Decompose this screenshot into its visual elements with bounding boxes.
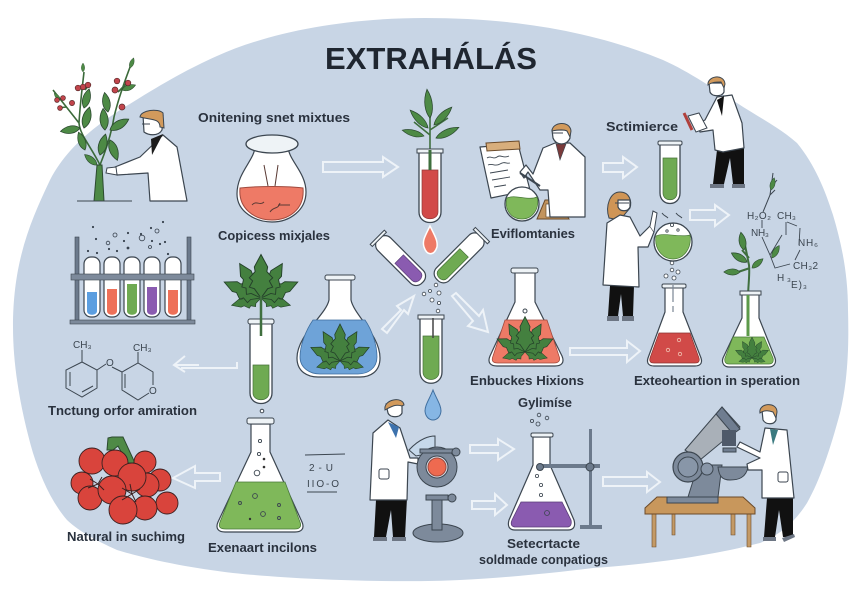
label: gylimise: Gylimíse — [518, 395, 572, 410]
apparatus — [409, 436, 463, 542]
test tube rack — [70, 221, 195, 324]
arrow — [690, 205, 729, 226]
title: EXTRAHÁLÁS — [325, 41, 537, 76]
purple flask and stand — [508, 413, 602, 530]
molecule — [66, 340, 157, 400]
molecule: CH₃ — [133, 343, 152, 354]
scientist bottom center — [370, 400, 418, 541]
blue drop — [425, 390, 441, 420]
arrow — [570, 341, 640, 362]
label: evifl: Eviflomtanies — [491, 226, 575, 241]
formula note: 2-U — [309, 463, 333, 474]
molecule: O — [149, 386, 157, 397]
arrow: down right — [452, 293, 488, 332]
green erlenmeyer — [217, 418, 303, 532]
formula note — [305, 454, 345, 492]
label: exenaart: Exenaart incilons — [208, 540, 317, 555]
label: science: Sctimierce — [606, 119, 678, 134]
tilted green tube — [430, 227, 490, 287]
label: natural: Natural in suchimg — [67, 529, 185, 544]
label: tincture: Tnctung orfor amiration — [48, 403, 197, 418]
green flask with plant — [722, 232, 776, 367]
label: selective: Setecrtacte — [507, 536, 580, 551]
bubbles — [422, 283, 441, 313]
woman scientist — [603, 192, 657, 321]
clipboard — [480, 141, 530, 198]
scientist with plant — [106, 110, 187, 201]
chemical formula with sprig: E)₃ — [791, 280, 807, 291]
formula note: IIO-O — [307, 479, 339, 490]
chemical formula with sprig: CH₃ — [777, 211, 796, 222]
tilted purple tube — [370, 230, 430, 290]
arrow left — [174, 356, 237, 372]
arrow — [603, 157, 637, 178]
plant with berries — [53, 57, 136, 201]
microscope on table — [645, 407, 755, 547]
lower tube — [418, 315, 444, 383]
arrow: flask to tube — [323, 157, 398, 177]
scientist upper right — [684, 77, 745, 188]
stand and round flask — [505, 187, 569, 221]
label: extraction: Exteoheartion in speration — [634, 373, 800, 388]
chemical formula with sprig — [747, 173, 818, 291]
round flask with red liquid — [237, 135, 306, 222]
blue flask — [297, 275, 380, 377]
label: compounds: soldmade conpatiogs — [479, 552, 608, 567]
arrow left to fruit — [173, 466, 220, 488]
molecule: CH₃ — [73, 340, 92, 351]
label: obtaining: Onitening snet mixtues — [198, 110, 350, 125]
chemical formula with sprig: NH₆ — [798, 238, 818, 249]
chemical formula with sprig: H₃ — [777, 273, 791, 284]
arrow — [603, 472, 660, 492]
red flask right — [647, 284, 702, 366]
central plant tube — [401, 89, 460, 254]
scientist at microscope — [737, 405, 795, 542]
chemical formula with sprig: H₂O₂ — [747, 211, 771, 222]
chemical formula with sprig: CH₃2 — [793, 261, 818, 272]
scientist with clipboard — [520, 123, 585, 217]
arrows to purple flask — [470, 439, 514, 515]
red fruit cluster — [71, 437, 178, 524]
molecule: O — [106, 358, 114, 369]
labels — [48, 110, 800, 567]
label: copicess: Copicess mixjales — [218, 228, 330, 243]
label: enbuckes: Enbuckes Hixions — [470, 373, 584, 388]
herb tube — [220, 255, 302, 413]
green tube — [658, 141, 682, 204]
large red erlenmeyer — [489, 268, 563, 366]
round green flask — [654, 213, 692, 280]
chemical formula with sprig: NH₃ — [751, 228, 769, 239]
arrow: up right — [382, 296, 414, 333]
